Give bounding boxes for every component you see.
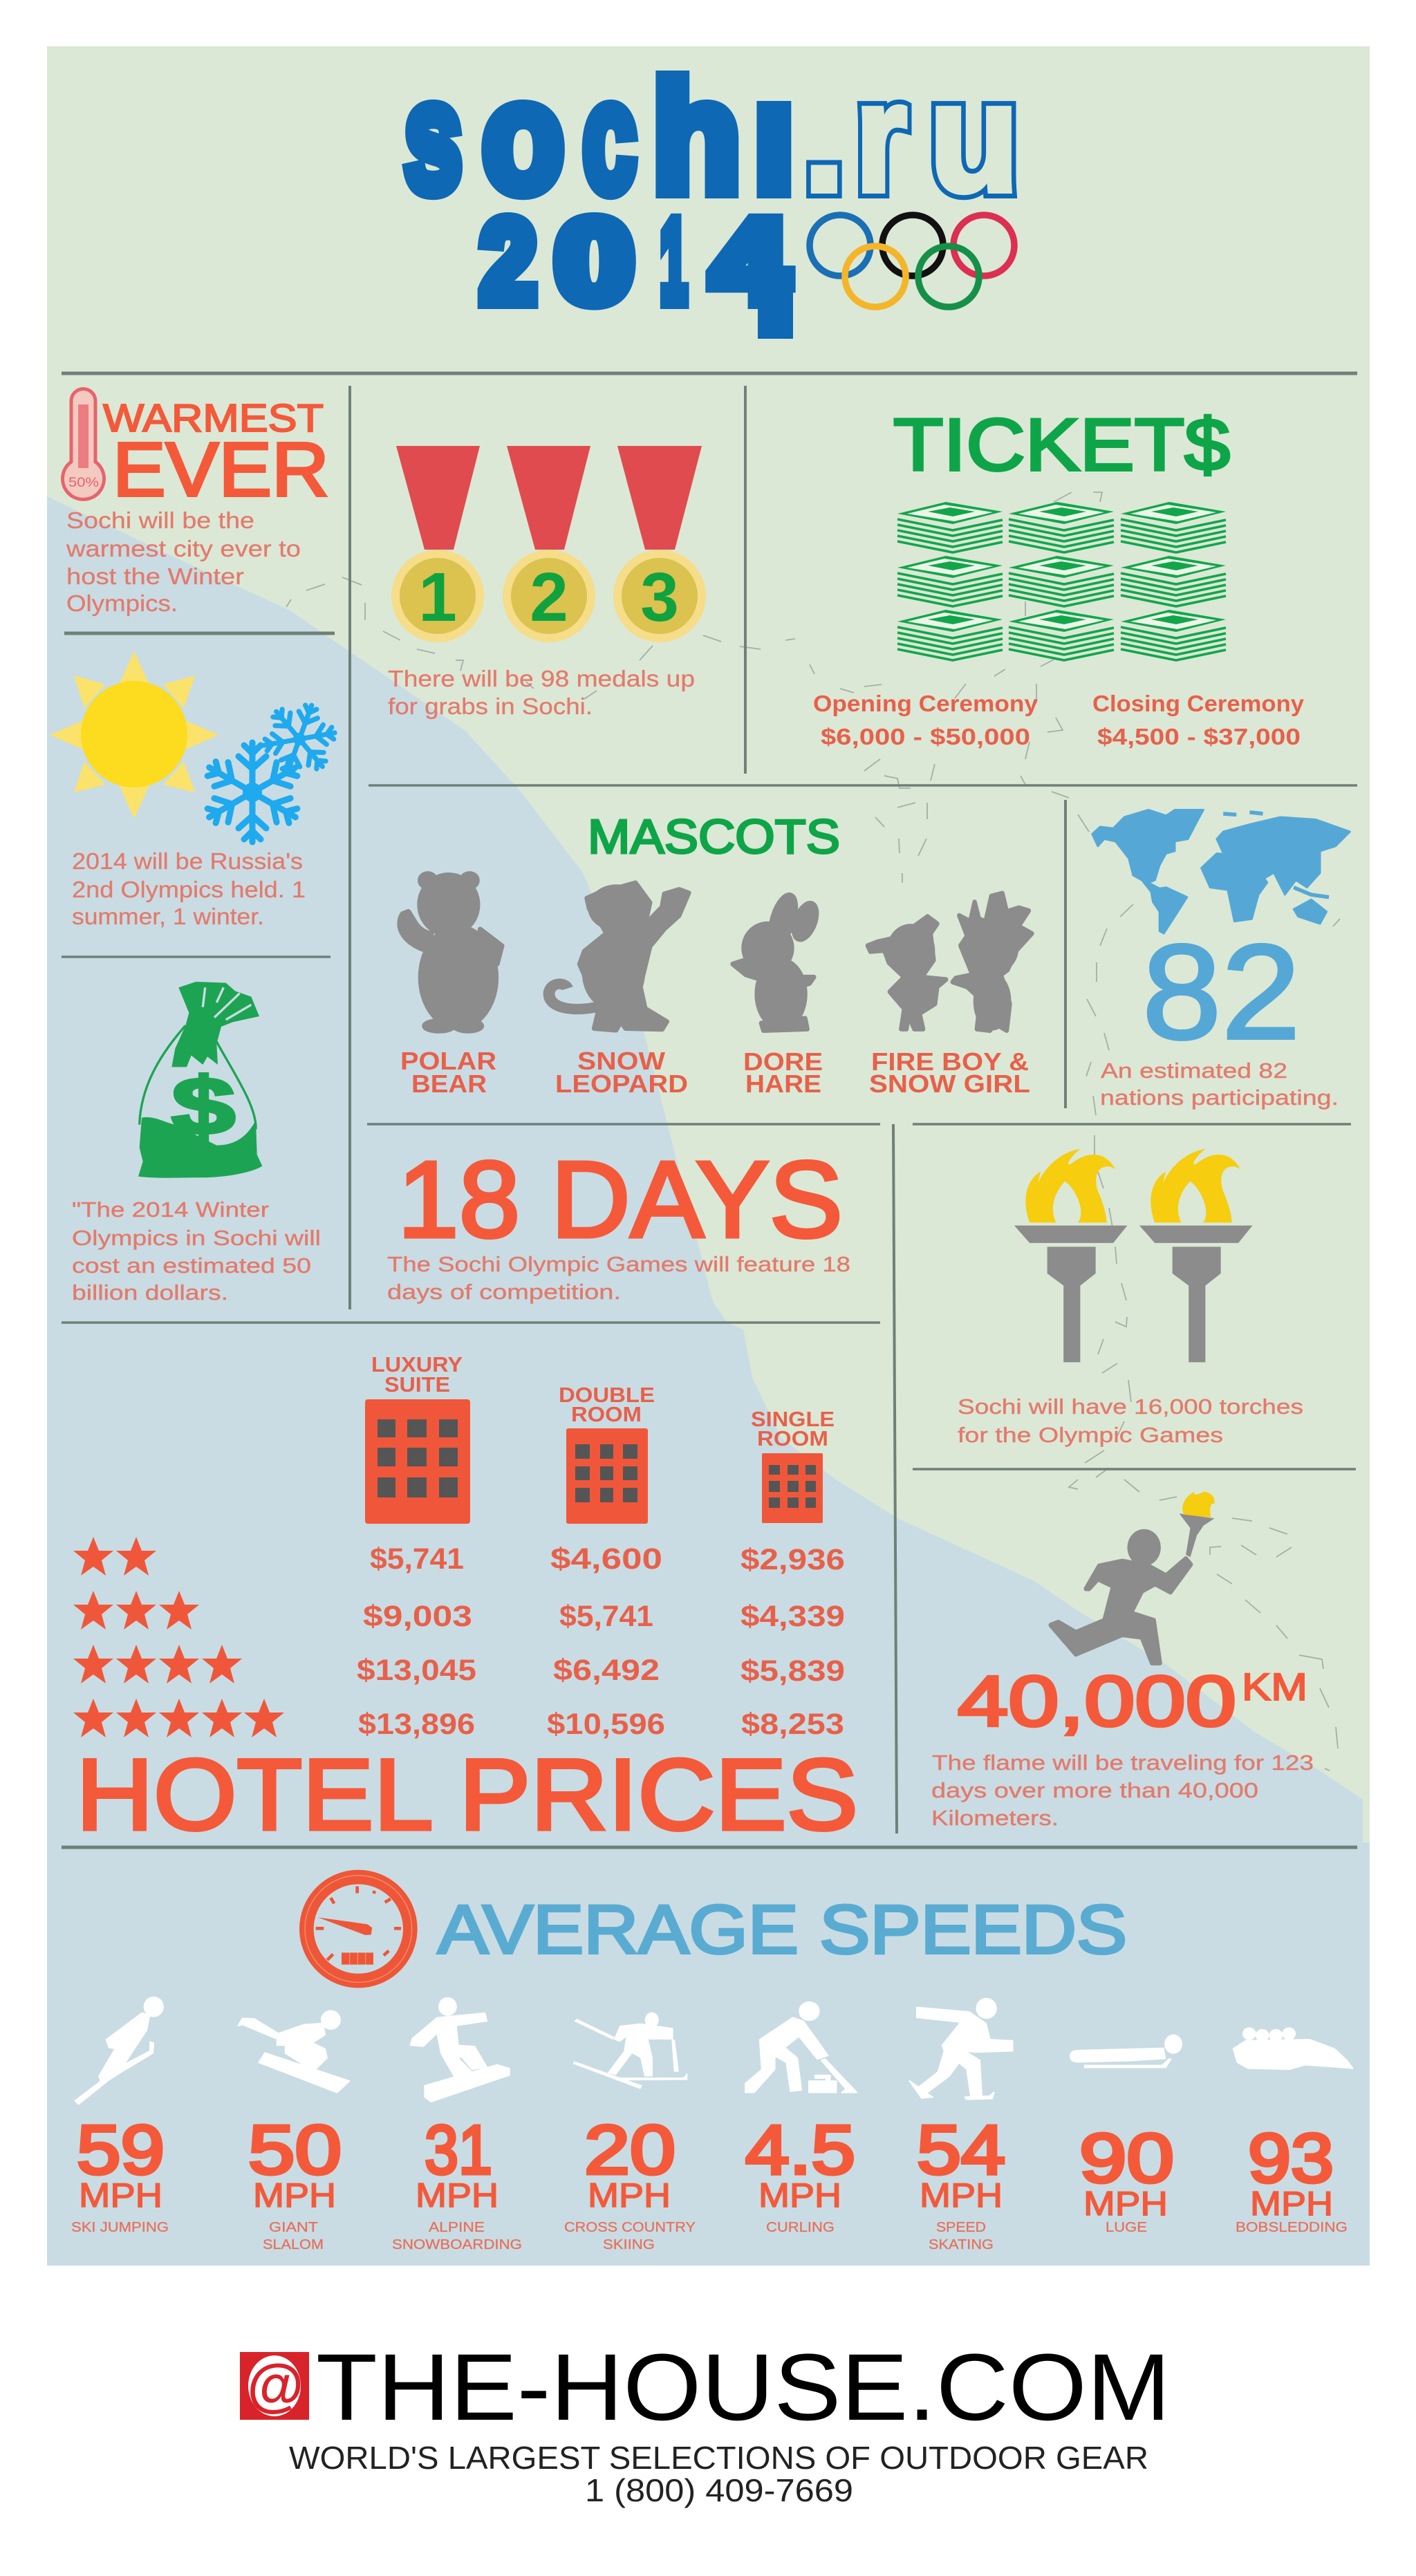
- logo word: sochi: o: [483, 50, 563, 224]
- flame route dashes: [286, 492, 1340, 1771]
- logo word: sochi: c: [583, 50, 636, 224]
- sport: speed skating: SKATING: [929, 2237, 994, 2252]
- logo word: sochi: i: [754, 50, 794, 224]
- logo word: sochi: s: [404, 50, 462, 224]
- price table: $5,741: [559, 1600, 653, 1633]
- medal 1: [391, 446, 484, 642]
- text: medals: There will be 98 medals up: [388, 666, 695, 691]
- text: second olympics: 2014 will be Russia's: [72, 848, 303, 874]
- sport: luge: MPH: [1083, 2185, 1168, 2223]
- panel: torches: [958, 1149, 1303, 1447]
- column: double room: [559, 1383, 655, 1524]
- panel: hotel prices: [73, 1352, 858, 1851]
- icon: snow leopard: [549, 883, 689, 1030]
- icon: speed skater: [910, 1999, 1012, 2100]
- text: 18 days: [387, 1252, 850, 1304]
- heading: hotel prices: HOTEL PRICES: [76, 1738, 858, 1851]
- mascot labels: BEAR: [411, 1070, 487, 1098]
- ticket prices: Closing Ceremony: [1092, 691, 1305, 716]
- sport: ski jumping: SKI JUMPING: [71, 2220, 169, 2235]
- text: medals: for grabs in Sochi.: [388, 693, 593, 719]
- sport: speed skating: [910, 1999, 1012, 2252]
- icon: torch left: [1014, 1149, 1127, 1362]
- sport: speed skating: SPEED: [936, 2220, 986, 2235]
- icon: runner with torch: [1051, 1492, 1215, 1663]
- column: single room: SINGLE: [751, 1407, 835, 1431]
- sport: giant slalom: GIANT: [269, 2220, 318, 2235]
- logo number: 2014: [481, 196, 793, 339]
- column: double room: DOUBLE: [559, 1383, 655, 1407]
- text: warmest city: [66, 507, 301, 616]
- sport: bobsledding: BOBSLEDDING: [1236, 2220, 1348, 2235]
- sport: bobsledding: MPH: [1250, 2185, 1333, 2223]
- ticket prices: [813, 691, 1305, 749]
- price table: $10,596: [547, 1708, 665, 1741]
- icon: curler: [746, 2002, 857, 2093]
- medal 3: 3: [640, 559, 679, 636]
- text: 18 days: days of competition.: [387, 1280, 621, 1304]
- column: luxury suite: SUITE: [384, 1372, 450, 1397]
- column: single room: [751, 1407, 835, 1523]
- text: torches: Sochi will have 16,000 torches: [958, 1394, 1303, 1419]
- figure: 40,000 km: 40,000: [958, 1661, 1236, 1741]
- heading: tickets: TICKET$: [893, 403, 1230, 486]
- mascot labels: SNOW GIRL: [869, 1070, 1030, 1098]
- tagline: WORLD'S LARGEST SELECTIONS OF OUTDOOR GEAR: [289, 2440, 1148, 2476]
- sport: alpine snowboarding: SNOWBOARDING: [392, 2237, 522, 2252]
- sport: speed skating: MPH: [920, 2177, 1003, 2214]
- text: 18 days: The Sochi Olympic Games will feature 18: [387, 1252, 850, 1276]
- figure: 40,000 km: [958, 1661, 1307, 1741]
- heading: mascots: MASCOTS: [588, 810, 840, 864]
- logo word: .ru outline: u: [929, 50, 1019, 224]
- sport: speed skating: 54: [917, 2111, 1005, 2189]
- ticket prices: $4,500 - $37,000: [1097, 724, 1301, 749]
- icon: polar bear: [400, 873, 502, 1032]
- medal 2: [503, 446, 595, 642]
- price table: [357, 1542, 845, 1741]
- heading: warmest ever: EVER: [113, 427, 329, 512]
- figure: 40,000 km: KM: [1242, 1665, 1307, 1708]
- sport: alpine snowboarding: [392, 1998, 522, 2252]
- price table: $6,492: [553, 1654, 660, 1687]
- figure: 82: 82: [1142, 917, 1301, 1067]
- price table: $4,339: [740, 1600, 845, 1633]
- sport: bobsledding: 93: [1248, 2120, 1334, 2197]
- price table: $2,936: [740, 1543, 845, 1576]
- icon: ski jumper: [75, 1997, 162, 2104]
- sport: ski jumping: 59: [77, 2111, 165, 2189]
- icon: money bag: $: [171, 1061, 235, 1151]
- text: cost: cost an estimated 50: [72, 1253, 311, 1278]
- heading: average speeds: AVERAGE SPEEDS: [438, 1891, 1127, 1968]
- sport: curling: MPH: [758, 2177, 841, 2214]
- olympic rings: [810, 215, 1014, 307]
- icon: snowflakes: [197, 694, 344, 848]
- sport: giant slalom: SLALOM: [263, 2237, 324, 2252]
- price table: $9,003: [363, 1600, 472, 1633]
- logo number: 2014: 2: [481, 196, 536, 326]
- sport: curling: CURLING: [766, 2220, 835, 2235]
- text: warmest city: Olympics.: [66, 590, 178, 616]
- section dividers: [62, 373, 1357, 1847]
- sport: cross country skiing: SKIING: [603, 2237, 655, 2252]
- panel: medals: [388, 446, 706, 719]
- medal 3: [613, 446, 706, 642]
- panel: 18 days: [387, 1139, 850, 1304]
- sport: luge: 90: [1079, 2120, 1174, 2197]
- mascot labels: LEOPARD: [555, 1070, 688, 1098]
- logo word: .ru outline: r: [855, 50, 907, 224]
- sport: ski jumping: MPH: [79, 2177, 162, 2214]
- text: second olympics: [72, 848, 306, 929]
- logo word: sochi: h: [653, 50, 740, 224]
- panel: nations: [1092, 810, 1350, 1110]
- sport: luge: LUGE: [1106, 2220, 1147, 2235]
- text: torches: for the Olympic Games: [958, 1423, 1223, 1447]
- sport: giant slalom: 50: [248, 2111, 342, 2189]
- text: cost: Olympics in Sochi will: [72, 1226, 321, 1250]
- sport: curling: 4.5: [745, 2111, 855, 2189]
- price table: $8,253: [741, 1708, 844, 1741]
- text: nations: nations participating.: [1100, 1085, 1339, 1110]
- text: medals: [388, 666, 695, 719]
- medal 1: 1: [418, 559, 457, 636]
- column: luxury suite: LUXURY: [371, 1352, 463, 1376]
- text: relay: [931, 1751, 1314, 1830]
- icon: money stacks: [897, 502, 1226, 660]
- icon: thermometer: 50%: [68, 476, 99, 490]
- panel: tickets: [813, 403, 1305, 749]
- logo word: .ru outline: .: [803, 50, 845, 224]
- logo number: 2014: 1: [660, 196, 687, 326]
- panel: torch relay: [931, 1492, 1314, 1830]
- text: cost: billion dollars.: [72, 1280, 228, 1305]
- logo number: 2014: 0: [556, 196, 633, 326]
- ticket prices: Opening Ceremony: [813, 691, 1038, 716]
- text: cost: [72, 1197, 321, 1305]
- panel: warmest ever: [63, 389, 329, 616]
- sport: alpine snowboarding: 31: [425, 2111, 492, 2189]
- footer: the-house.com: [240, 2335, 1171, 2508]
- panel: mascots: [400, 810, 1032, 1098]
- mascot labels: FIRE BOY &: [871, 1047, 1029, 1076]
- sport: cross country skiing: MPH: [588, 2177, 671, 2214]
- tagline: 1 (800) 409-7669: [585, 2472, 853, 2508]
- text: second olympics: summer, 1 winter.: [72, 904, 264, 929]
- icon: fire boy and snow girl: [868, 893, 1032, 1031]
- sport: giant slalom: [239, 2010, 349, 2252]
- heading: warmest ever: [103, 396, 329, 512]
- text: warmest city: warmest city ever to: [66, 536, 301, 561]
- icon: money bag: [138, 982, 262, 1178]
- icon: world map: [1092, 810, 1350, 933]
- price table: $13,045: [357, 1654, 476, 1687]
- panel: sun and snow: [50, 651, 344, 929]
- logo word: .ru outline: .: [803, 50, 845, 224]
- sport: luge: [1070, 2035, 1182, 2235]
- price table: $5,839: [740, 1654, 845, 1688]
- icon: luge slider: [1070, 2035, 1182, 2068]
- icon: snowboarder: [411, 1998, 509, 2102]
- sport: alpine snowboarding: MPH: [416, 2177, 499, 2214]
- icon: slalom skier: [239, 2010, 349, 2093]
- logo word: sochi: [404, 50, 802, 224]
- logo word: .ru outline: [803, 50, 1019, 224]
- sport: curling: [745, 2002, 857, 2235]
- sport: cross country skiing: CROSS COUNTRY: [564, 2220, 696, 2235]
- price table: $13,896: [358, 1708, 475, 1741]
- text: relay: The flame will be traveling for 123: [932, 1751, 1314, 1775]
- text: warmest city: host the Winter: [66, 563, 244, 589]
- text: second olympics: 2nd Olympics held. 1: [72, 877, 306, 902]
- panel: cost: [72, 982, 321, 1305]
- mascot labels: POLAR: [400, 1047, 496, 1075]
- mascot labels: DORE: [743, 1047, 823, 1076]
- icon: bobsled: [1233, 2028, 1352, 2069]
- sport: alpine snowboarding: ALPINE: [429, 2220, 485, 2235]
- mascot labels: HARE: [745, 1070, 821, 1098]
- mascot labels: [400, 1047, 1030, 1098]
- sport: giant slalom: MPH: [253, 2177, 336, 2214]
- column: luxury suite: [365, 1352, 470, 1524]
- text: relay: days over more than 40,000: [931, 1778, 1258, 1802]
- sport: bobsledding: [1233, 2028, 1352, 2235]
- panel: average speeds: [71, 1876, 1352, 2252]
- logo word: .ru outline: u: [929, 50, 1019, 224]
- text: warmest city: Sochi will be the: [66, 507, 254, 533]
- wordmark: THE-HOUSE.COM: [316, 2335, 1171, 2440]
- logo: Sochi.ru 2014 with Olympic rings: [404, 50, 1019, 339]
- text: cost: "The 2014 Winter: [72, 1197, 269, 1222]
- column: double room: ROOM: [571, 1402, 642, 1426]
- text: torches: [958, 1394, 1303, 1447]
- column: single room: ROOM: [757, 1426, 828, 1450]
- mascot labels: SNOW: [577, 1047, 665, 1075]
- icon: torch right: [1139, 1149, 1252, 1362]
- price table: $5,741: [370, 1542, 464, 1576]
- icon: dore hare: [733, 891, 821, 1031]
- heading: warmest ever: WARMEST: [103, 396, 324, 440]
- sport: cross country skiing: 20: [584, 2111, 676, 2189]
- logo word: .ru outline: r: [855, 50, 907, 224]
- sport: cross country skiing: [564, 2013, 696, 2252]
- icon: the-house logo: @: [246, 2353, 303, 2418]
- text: nations: [1100, 1058, 1339, 1110]
- tagline: [289, 2440, 1148, 2508]
- icon: cross country skier: [572, 2013, 687, 2089]
- ticket prices: $6,000 - $50,000: [821, 724, 1030, 749]
- heading: 18 days: 18 DAYS: [398, 1139, 843, 1260]
- star ratings: [73, 1537, 284, 1737]
- text: nations: An estimated 82: [1101, 1058, 1287, 1083]
- text: relay: Kilometers.: [931, 1806, 1059, 1830]
- icon: sun: [50, 651, 218, 819]
- price table: $4,600: [550, 1542, 662, 1576]
- logo number: 2014: 4: [712, 196, 788, 326]
- icon: speedometer: [305, 1876, 412, 1982]
- icon: thermometer: [63, 389, 104, 499]
- sport: ski jumping: [71, 1997, 169, 2235]
- medal 2: 2: [530, 559, 568, 636]
